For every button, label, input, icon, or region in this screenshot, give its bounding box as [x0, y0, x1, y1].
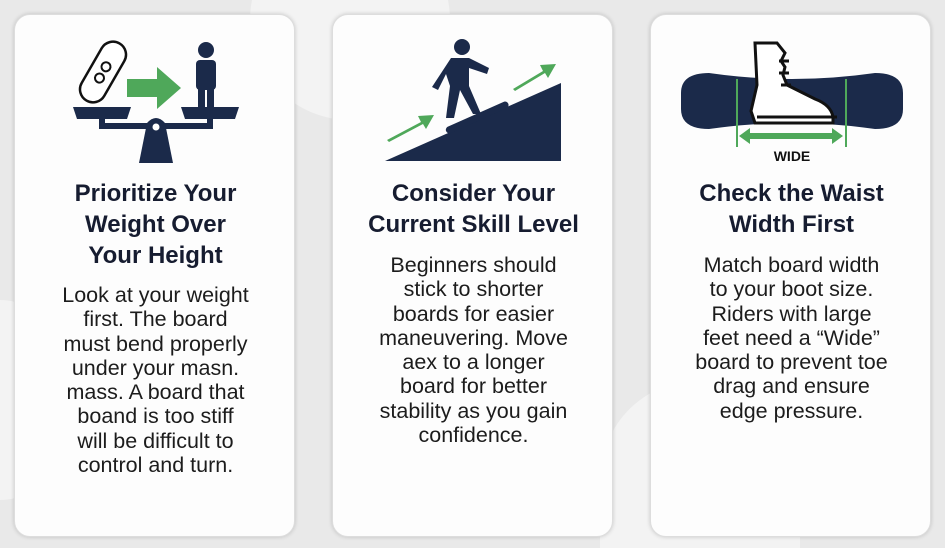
body text	[379, 253, 568, 447]
icon: board with boot and WIDE	[681, 42, 903, 164]
body text: control and turn.	[78, 453, 233, 477]
heading	[368, 180, 579, 238]
body text: aex to a longer	[402, 350, 545, 374]
body text	[62, 283, 249, 477]
body text: first. The board	[83, 307, 228, 331]
body text: Beginners should	[390, 253, 557, 277]
body text: to your boot size.	[710, 277, 873, 301]
body text: board to prevent toe	[695, 350, 888, 374]
heading: Prioritize Your	[75, 180, 236, 207]
panel: weight	[14, 14, 295, 537]
icon: scale with board and person	[73, 40, 239, 163]
heading: Current Skill Level	[368, 211, 579, 238]
body text: edge pressure.	[720, 399, 863, 423]
body text: must bend properly	[63, 332, 248, 356]
body text: Match board width	[704, 253, 879, 277]
body text: stability as you gain	[380, 399, 567, 423]
body text: maneuvering. Move	[379, 326, 568, 350]
icon: board with boot and WIDE: WIDE	[774, 148, 810, 164]
body text: drag and ensure	[713, 374, 870, 398]
heading: Check the Waist	[699, 180, 884, 207]
panel: skill	[332, 14, 613, 537]
heading: Width First	[729, 211, 854, 238]
icon: snowboarder on slope	[385, 39, 561, 161]
body text: Riders with large	[711, 302, 872, 326]
body text: stick to shorter	[404, 277, 543, 301]
body text: Look at your weight	[62, 283, 249, 307]
heading: Your Height	[88, 242, 223, 269]
body text: mass. A board that	[66, 380, 245, 404]
body text: board for better	[400, 374, 547, 398]
heading: Consider Your	[392, 180, 555, 207]
body text: boards for easier	[393, 302, 554, 326]
body text: confidence.	[419, 423, 528, 447]
body text: feet need a “Wide”	[703, 326, 880, 350]
panel: waist	[650, 14, 931, 537]
body text: boand is too stiff	[77, 404, 234, 428]
heading	[75, 180, 236, 269]
body text	[695, 253, 888, 423]
body text: under your masn.	[72, 356, 239, 380]
heading: Weight Over	[85, 211, 226, 238]
body text: will be difficult to	[77, 429, 234, 453]
heading	[699, 180, 884, 238]
